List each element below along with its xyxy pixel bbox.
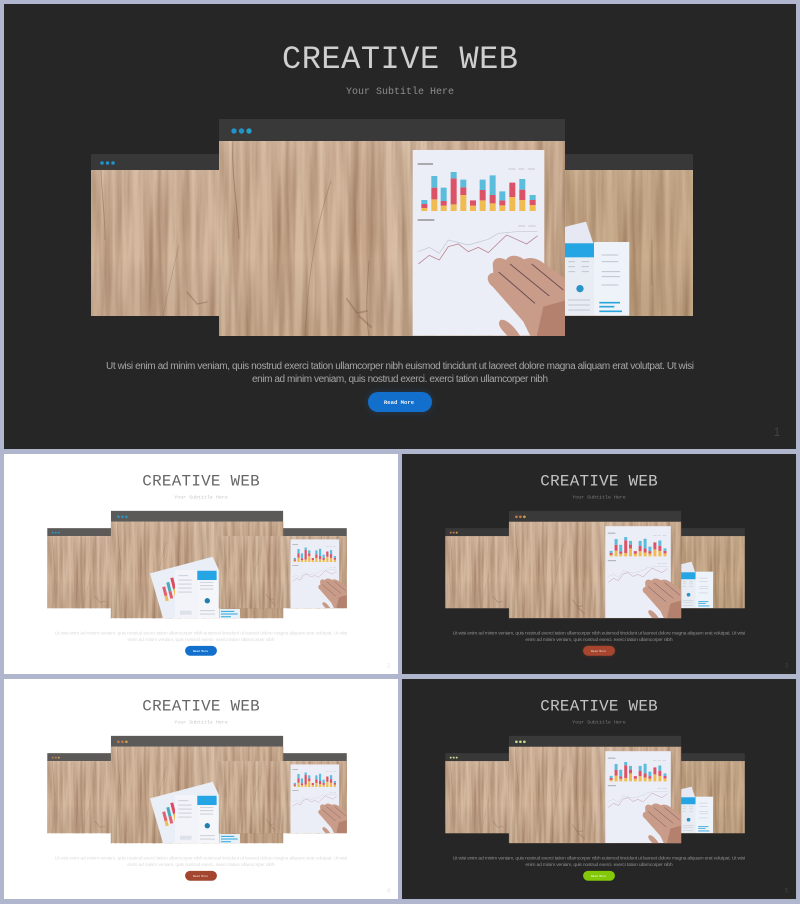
page number: 4 — [387, 889, 391, 895]
panel: white slide, blue accent — [4, 454, 398, 674]
body text: enim ad minim veniam, quis nostrud exerci. exerci tation ullamcorper nibh — [252, 374, 548, 385]
left browser window — [91, 154, 219, 316]
button: read more — [583, 646, 615, 656]
body text: enim ad minim veniam, quis nostrud exerci. exerci tation ullamcorper nibh — [525, 637, 673, 643]
left browser window — [47, 753, 111, 833]
page number: 2 — [387, 664, 390, 670]
title: CREATIVE WEB — [282, 41, 518, 78]
button: read more — [185, 646, 217, 656]
panel: dark slide, red accent — [402, 454, 796, 674]
left browser window — [47, 528, 111, 608]
body text — [55, 630, 347, 643]
overlay image window — [219, 761, 347, 833]
button: read more: Read More — [591, 874, 606, 878]
body text: enim ad minim veniam, quis nostrud exerci. exerci tation ullamcorper nibh — [525, 862, 673, 868]
left browser window — [445, 528, 509, 608]
page number: 1 — [774, 425, 781, 439]
button: read more: Read More — [384, 399, 415, 406]
body text — [55, 855, 347, 868]
center browser window — [111, 511, 283, 619]
button: read more — [583, 871, 615, 881]
subtitle: Your Subtitle Here — [572, 720, 626, 725]
button: read more: Read More — [193, 874, 208, 878]
right browser window — [680, 753, 745, 833]
left browser window — [445, 753, 509, 833]
page number: 3 — [785, 664, 789, 670]
page number: 5 — [785, 889, 789, 895]
overlay image window — [219, 536, 347, 608]
body text: Ut wisi enim ad minim veniam, quis nostrud exerci tation ullamcorper nibh euismod tincidunt ut laoreet dolore magna aliquam erat volutpat. Ut wisi — [106, 361, 694, 372]
body text: Ut wisi enim ad minim veniam, quis nostrud exerci tation ullamcorper nibh euismod tincidunt ut laoreet dolore magna aliquam erat volutpat. Ut wisi — [453, 630, 745, 636]
panel: white slide, red accent — [4, 679, 398, 899]
subtitle: Your Subtitle Here — [174, 495, 228, 500]
title: CREATIVE WEB — [142, 473, 260, 491]
body text: enim ad minim veniam, quis nostrud exerci. exerci tation ullamcorper nibh — [127, 637, 275, 643]
title: CREATIVE WEB — [142, 698, 260, 716]
body text: enim ad minim veniam, quis nostrud exerci. exerci tation ullamcorper nibh — [127, 862, 275, 868]
button: read more: Read More — [591, 649, 606, 653]
panel: main dark slide — [4, 4, 796, 449]
title: CREATIVE WEB — [540, 698, 658, 716]
title: CREATIVE WEB — [540, 473, 658, 491]
right browser window header — [283, 753, 347, 761]
subtitle: Your Subtitle Here — [174, 720, 228, 725]
subtitle: Your Subtitle Here — [572, 495, 626, 500]
body text — [453, 630, 745, 643]
body text — [106, 361, 694, 385]
button: read more — [368, 392, 432, 412]
button: read more: Read More — [193, 649, 208, 653]
center browser window — [509, 736, 682, 843]
button: read more — [185, 871, 217, 881]
center browser window — [111, 736, 283, 844]
right browser window — [563, 154, 693, 316]
right browser window — [680, 528, 745, 608]
body text: Ut wisi enim ad minim veniam, quis nostrud exerci tation ullamcorper nibh euismod tincidunt ut laoreet dolore magna aliquam erat volutpat. Ut wisi — [453, 855, 745, 861]
body text — [453, 855, 745, 868]
right browser window header — [283, 528, 347, 536]
panel: dark slide, green accent — [402, 679, 796, 899]
center browser window — [219, 119, 567, 337]
subtitle: Your Subtitle Here — [346, 86, 454, 98]
body text: Ut wisi enim ad minim veniam, quis nostrud exerci tation ullamcorper nibh euismod tincidunt ut laoreet dolore magna aliquam erat volutpat. Ut wisi — [55, 855, 347, 861]
center browser window — [509, 511, 682, 618]
body text: Ut wisi enim ad minim veniam, quis nostrud exerci tation ullamcorper nibh euismod tincidunt ut laoreet dolore magna aliquam erat volutpat. Ut wisi — [55, 630, 347, 636]
